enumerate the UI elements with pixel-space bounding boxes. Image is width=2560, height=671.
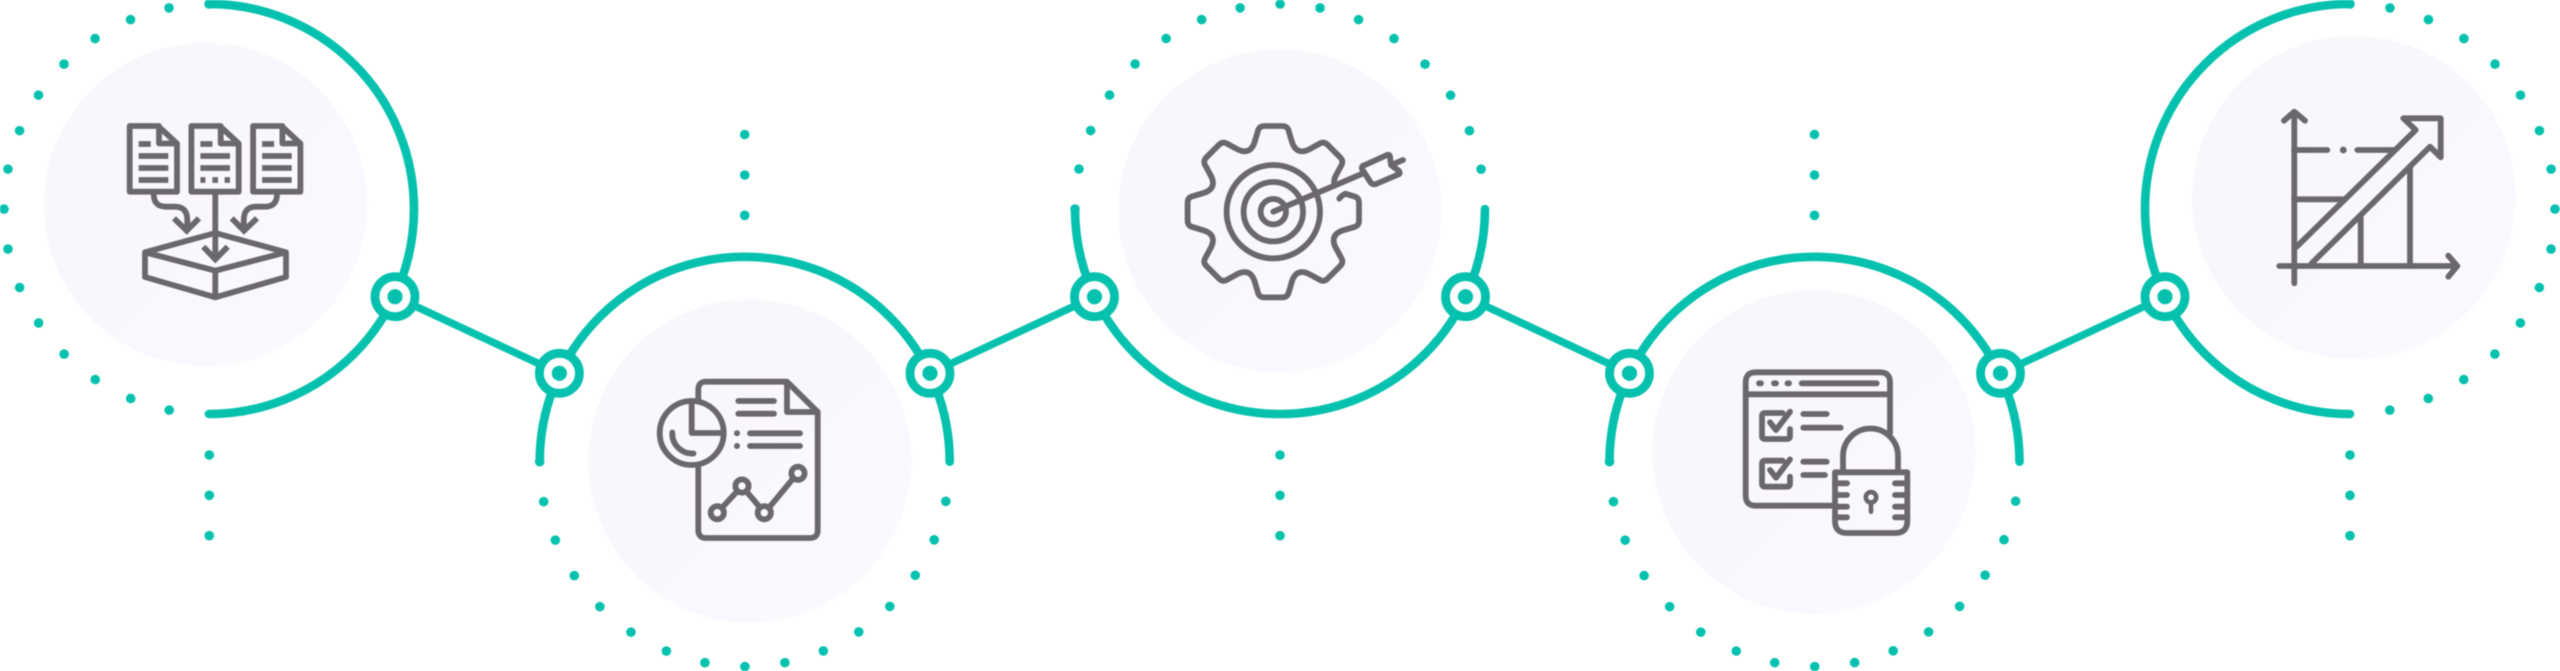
icon: documents into box: [130, 126, 300, 297]
step 4 ring: [1610, 130, 2020, 667]
icon: gear with target and arrow: [1186, 124, 1403, 299]
step 2 ring: [540, 130, 950, 667]
icon: growth chart with rising arrow: [2279, 112, 2457, 283]
connection nodes: [375, 277, 2185, 393]
step 4 background disc: [1652, 290, 1976, 614]
icon: report with pie and line chart: [660, 382, 818, 538]
step 5 ring: [2145, 4, 2555, 540]
step 3 background disc: [1118, 49, 1442, 373]
step 3 ring: [1075, 4, 1485, 540]
step 1 ring: [4, 4, 414, 540]
step 1 background disc: [44, 43, 367, 366]
connector lines between steps: [395, 297, 2165, 373]
icon: secure checklist window with padlock: [1746, 372, 1907, 533]
step 5 background disc: [2192, 36, 2516, 359]
step 2 background disc: [588, 299, 912, 623]
